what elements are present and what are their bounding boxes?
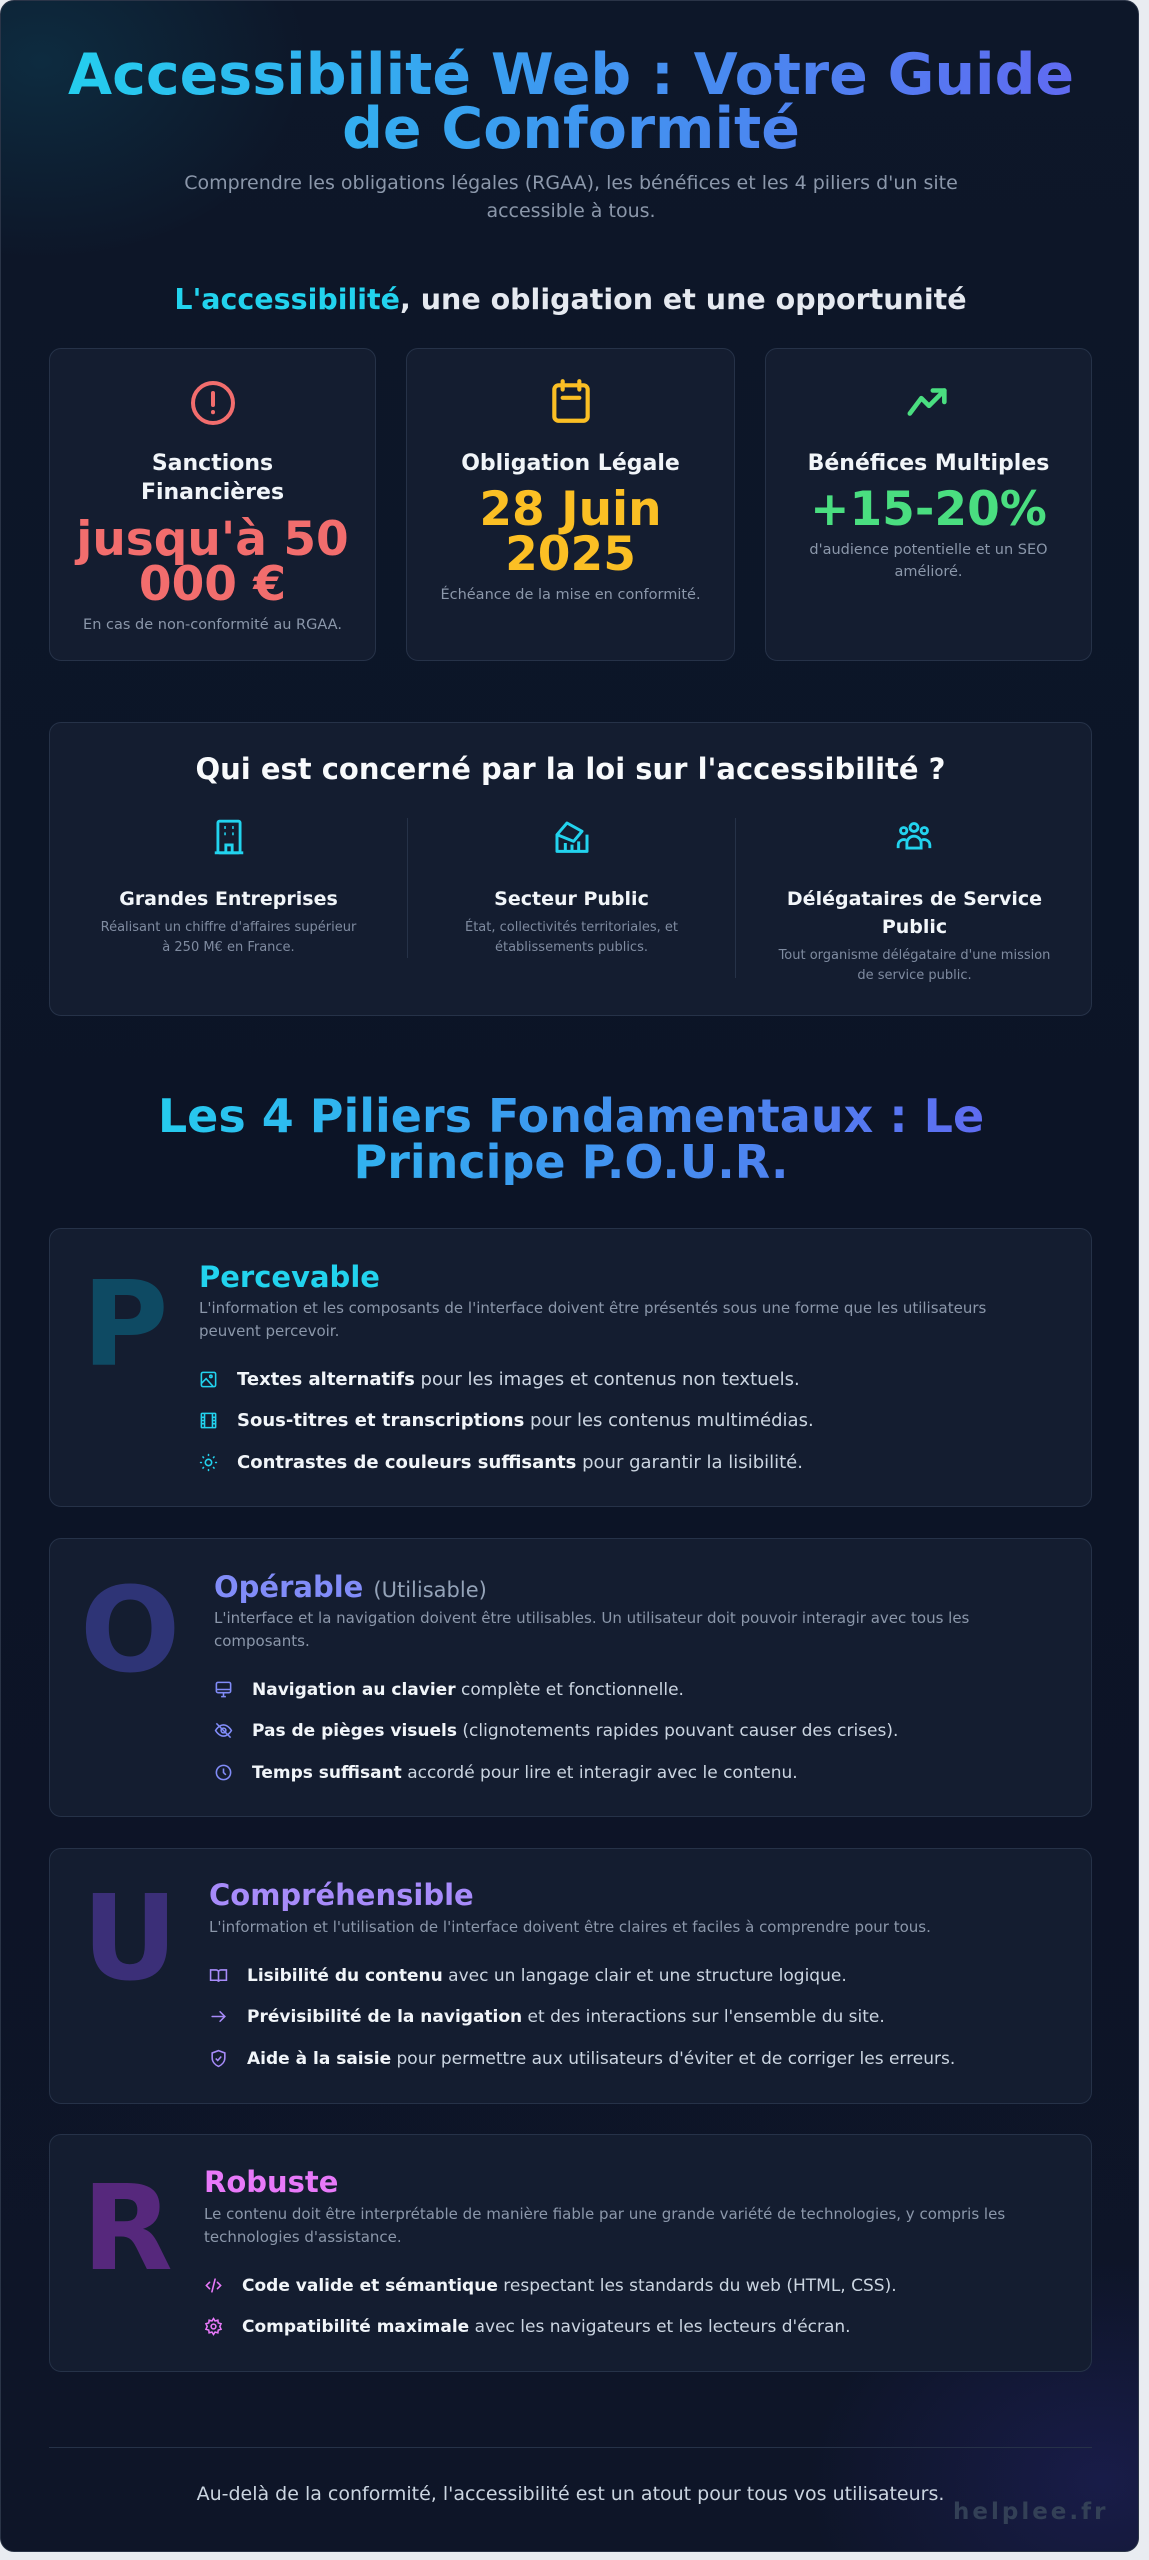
title: de Conformité — [342, 96, 800, 162]
section heading: obligation: L'accessibilité, une obligation et une opportunité — [174, 283, 967, 316]
column: secteur public: État, collectivités territoriales, et établissements publics. — [465, 920, 678, 955]
item: contrast: Contrastes de couleurs suffisants pour garantir la lisibilité. — [237, 1452, 803, 1473]
value — [74, 512, 349, 612]
value — [479, 482, 662, 582]
letter R: R — [82, 2159, 173, 2297]
value: 000 € — [139, 557, 286, 612]
description: L'interface et la navigation doivent être utilisables. Un utilisateur doit pouvoir interagir avec tous les composants. — [214, 1609, 969, 1650]
card: benefits — [765, 348, 1092, 661]
heading — [141, 451, 284, 505]
icon: trending up — [908, 388, 947, 416]
column: délégataires — [778, 822, 1050, 983]
heading: Sanctions — [152, 451, 273, 476]
note: Échéance de la mise en conformité. — [440, 587, 701, 603]
heading: Bénéfices Multiples — [808, 451, 1049, 476]
letter U: U — [82, 1869, 178, 2007]
item: valid code: Code valide et sémantique respectant les standards du web (HTML, CSS). — [242, 2276, 897, 2296]
value: 2025 — [505, 527, 636, 582]
item: time: Temps suffisant accordé pour lire et interagir avec le contenu. — [252, 1763, 798, 1783]
panel: who is concerned — [49, 722, 1092, 1016]
panel: U compréhensible — [49, 1848, 1092, 2104]
card: sanctions — [49, 348, 376, 661]
column: entreprises: Grandes Entreprises — [119, 888, 338, 910]
panel: R robuste — [49, 2134, 1092, 2372]
note: d'audience potentielle et un SEO amélioré. — [809, 542, 1048, 580]
item: input help: Aide à la saisie pour permettre aux utilisateurs d'éviter et de corriger les erreurs. — [247, 2049, 955, 2069]
item: compatibility: Compatibilité maximale avec les navigateurs et les lecteurs d'écran. — [242, 2317, 851, 2337]
heading: Financières — [141, 480, 284, 505]
letter O: O — [80, 1561, 180, 1699]
description: L'information et l'utilisation de l'interface doivent être claires et faciles à comprendre pour tous. — [209, 1918, 931, 1936]
heading: Obligation Légale — [461, 451, 680, 476]
title — [21, 48, 1121, 156]
item: no visual traps: Pas de pièges visuels (clignotements rapides pouvant causer des crises). — [252, 1721, 898, 1741]
panel: P percevable — [49, 1228, 1092, 1507]
heading: 4 pillars — [101, 1093, 1041, 1185]
title: Accessibilité Web : Votre Guide — [68, 42, 1074, 108]
note: En cas de non-conformité au RGAA. — [83, 617, 342, 633]
column: secteur public — [465, 822, 678, 955]
column: entreprises — [101, 820, 356, 955]
description: Le contenu doit être interprétable de manière fiable par une grande variété de technologies, y compris les technologies d'assistance. — [204, 2205, 1005, 2246]
value: +15-20% — [810, 482, 1047, 537]
heading: 4 pillars: Les 4 Piliers Fondamentaux : Le — [158, 1089, 984, 1143]
heading: 4 pillars: Principe P.O.U.R. — [354, 1135, 788, 1189]
title: Opérable (Utilisable) — [214, 1570, 487, 1604]
column: délégataires: Délégataires de Service Public — [787, 888, 1042, 938]
title: Percevable — [199, 1260, 380, 1294]
icon: alert — [191, 381, 235, 425]
item: predictability: Prévisibilité de la navigation et des interactions sur l'ensemble du site. — [247, 2007, 885, 2027]
value: jusqu'à 50 — [76, 512, 349, 567]
icon: building — [214, 820, 244, 854]
column: entreprises: Réalisant un chiffre d'affaires supérieur à 250 M€ en France. — [101, 920, 356, 955]
title: Compréhensible — [209, 1878, 474, 1912]
column: délégataires: Tout organisme délégataire d'une mission de service public. — [779, 948, 1050, 983]
item: subtitles: Sous-titres et transcriptions pour les contenus multimédias. — [237, 1410, 814, 1431]
column: secteur public: Secteur Public — [494, 888, 649, 910]
icon: public building — [555, 822, 588, 853]
panel: O opérable — [49, 1538, 1092, 1817]
footer text: Au-delà de la conformité, l'accessibilité est un atout pour tous vos utilisateurs. — [197, 2483, 944, 2505]
watermark: helplee.fr — [953, 2499, 1108, 2525]
description: L'information et les composants de l'interface doivent être présentés sous une forme que les utilisateurs peuvent percevoir. — [199, 1299, 986, 1340]
heading: Qui est concerné par la loi sur l'accessibilité ? — [195, 752, 946, 786]
value: 28 Juin — [479, 482, 662, 537]
item: keyboard: Navigation au clavier complète et fonctionnelle. — [252, 1680, 684, 1700]
card: obligation — [406, 348, 735, 661]
item: readability: Lisibilité du contenu avec un langage clair et une structure logique. — [247, 1966, 847, 1986]
icon: users — [896, 822, 932, 850]
letter P: P — [82, 1255, 168, 1393]
subtitle: Comprendre les obligations légales (RGAA), les bénéfices et les 4 piliers d'un site accessible à tous. — [184, 172, 958, 222]
item: alt text: Textes alternatifs pour les images et contenus non textuels. — [237, 1369, 800, 1390]
icon: calendar — [552, 379, 590, 423]
title: Robuste — [204, 2165, 338, 2199]
